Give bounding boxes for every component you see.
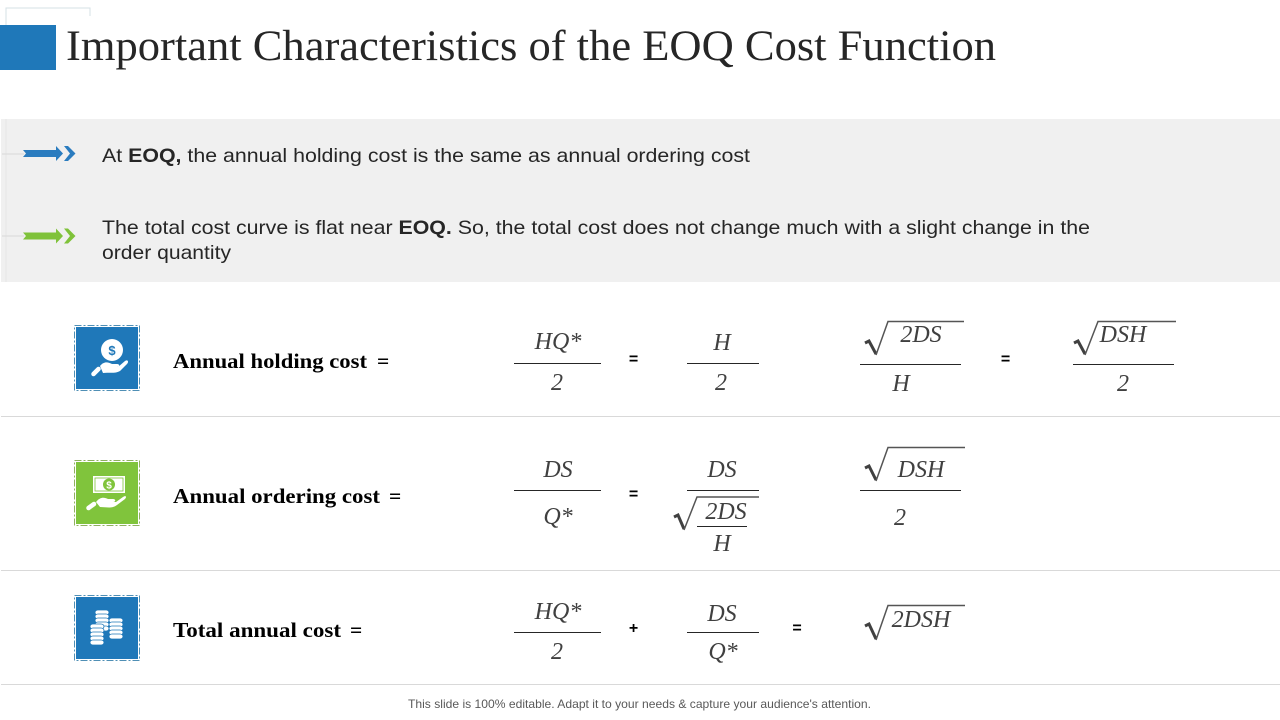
formula: DS/Q* = DS/root(2DS/H): H [712,531,732,557]
formula: HQ*/2 = H/2: 2 [551,370,563,396]
formula: root DSH / 2: DSH [1099,322,1148,348]
formula: HQ*/2 + DS/Q* = root 2DSH: Q* [708,639,738,665]
formula: HQ*/2 = H/2 [514,329,759,396]
formula: HQ*/2 + DS/Q* = root 2DSH: = [792,620,802,637]
formula: HQ*/2 + DS/Q* = root 2DSH: 2DSH [892,607,952,633]
formula: HQ*/2 + DS/Q* = root 2DSH: + [629,620,638,637]
formula: DS/Q* = DS/root(2DS/H): Q* [543,504,573,530]
icon: blue arrow [23,146,76,161]
formula: HQ*/2 = H/2: = [629,351,638,368]
formula: root DSH / 2 [860,448,965,531]
formula: root DSH / 2 [1073,322,1176,397]
formula: root DSH / 2: 2 [894,505,906,531]
formula: HQ*/2 = H/2: H [712,330,732,356]
icon: hand holding coin [74,326,140,390]
formula: HQ*/2 + DS/Q* = root 2DSH: DS [706,601,737,627]
label: = [389,484,401,508]
text: first characteristic: At EOQ, the annual holding cost is the same as annual ordering cost [102,145,751,167]
text: second characteristic [102,217,1090,264]
formula: DS/Q* = DS/root(2DS/H): 2DS [705,499,747,525]
formula: root 2DS / H: H [891,371,911,397]
text: second characteristic: order quantity [102,242,231,264]
formula: DS/Q* = DS/root(2DS/H): DS [542,457,573,483]
formula: HQ*/2 + DS/Q* = root 2DSH [514,599,965,665]
formula: root 2DS / H [860,322,964,397]
footer note: This slide is 100% editable. Adapt it to your needs & capture your audience's attention. [408,697,871,711]
formula: HQ*/2 + DS/Q* = root 2DSH: 2 [551,639,563,665]
icon: coin stacks [74,596,140,660]
formula: root DSH / 2: DSH [897,457,946,483]
icon: green arrow [23,228,76,244]
label: = [377,349,389,373]
title: Important Characteristics of the EOQ Cost Function [66,23,996,70]
text: second characteristic: The total cost curve is flat near EOQ. So, the total cost does not change much with a slight change in the [102,217,1090,239]
row: annual holding cost: = [1001,351,1010,368]
row: annual holding cost [74,322,1176,397]
formula: DS/Q* = DS/root(2DS/H): DS [706,457,737,483]
formula: HQ*/2 = H/2: HQ* [534,329,581,355]
row: annual ordering cost [74,448,965,557]
title accent block [0,25,56,70]
icon: hand holding banknote: $ [106,480,112,492]
formula: root 2DS / H: 2DS [900,322,942,348]
label: Total annual cost [173,618,342,642]
icon: hand holding banknote [74,460,140,526]
formula: DS/Q* = DS/root(2DS/H): = [629,486,638,503]
formula: root DSH / 2: 2 [1117,371,1129,397]
formula: HQ*/2 = H/2: 2 [715,370,727,396]
panel: key characteristics [1,119,1280,282]
formula: HQ*/2 + DS/Q* = root 2DSH: HQ* [534,599,581,625]
formula: DS/Q* = DS/root(2DS/H) [514,457,759,557]
label: = [350,618,362,642]
row: total annual cost [74,596,965,665]
label: Annual holding cost [173,349,368,373]
icon: hand holding coin: $ [108,343,116,358]
label: Annual ordering cost [173,484,381,508]
